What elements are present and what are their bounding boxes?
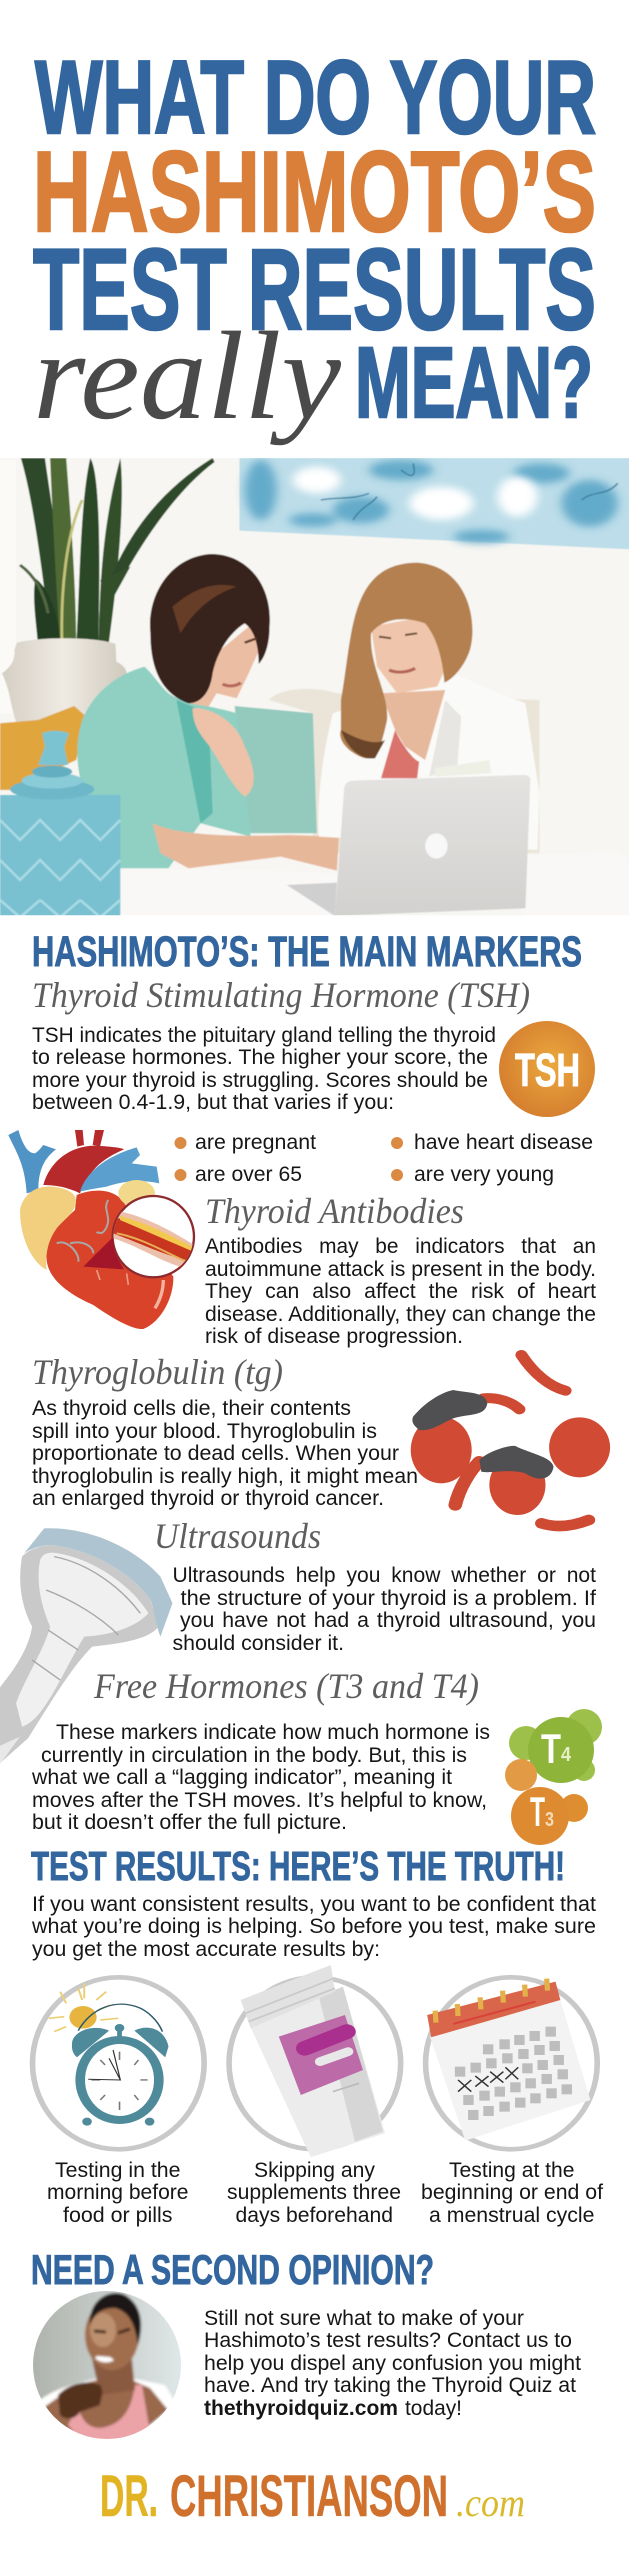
magnifier (113, 1196, 197, 1277)
text block: TSH: more your thyroid is struggling. Scores should be (32, 1069, 488, 1092)
text block: thyroglobulin: thyroglobulin is really high, it might mean (32, 1465, 418, 1488)
bullet: are over 65: are over 65 (195, 1163, 302, 1186)
text block: test results intro (31, 1893, 596, 1961)
text block: antibodies: disease. Additionally, they can change the (205, 1303, 596, 1326)
text block: antibodies: They can also affect the risk of heart (205, 1280, 596, 1303)
logo: dr christianson: .com (456, 2480, 525, 2525)
heading: ultrasounds: Ultrasounds (154, 1516, 321, 1556)
bullet: have heart disease: have heart disease (414, 1131, 593, 1154)
text block: second opinion: help you dispel any confusion you might (204, 2352, 581, 2375)
logo: dr christianson: DR. (100, 2464, 158, 2529)
caption: supplements: Skipping any (254, 2159, 376, 2182)
text block: second opinion: have. And try taking the Thyroid Quiz at (204, 2374, 576, 2397)
text block: second opinion (204, 2307, 581, 2420)
icon: calendar (426, 1977, 597, 2149)
icon: T4 and T3 molecules (505, 1709, 602, 1845)
yellow cushion (0, 706, 86, 790)
ceramic stool and lid (0, 731, 120, 918)
text block: second opinion: Still not sure what to make of your (204, 2307, 524, 2330)
sofa back (269, 689, 539, 853)
caption: cycle: Testing at the (449, 2159, 574, 2182)
text block: test results intro: If you want consistent results, you want to be confident that (32, 1893, 596, 1916)
text block: thyroglobulin (32, 1397, 418, 1510)
woman one (77, 554, 339, 871)
planter pot (2, 638, 127, 722)
photo: two women looking at a laptop (0, 457, 629, 923)
text block: antibodies (205, 1235, 596, 1348)
text block: free hormones (31, 1721, 490, 1834)
text block: ultrasounds: you have not had a thyroid ultrasound, you (180, 1609, 596, 1632)
caption: morning: food or pills (63, 2204, 172, 2227)
list: when TSH varies (174, 1131, 593, 1186)
plant (20, 458, 215, 647)
text block: TSH: to release hormones. The higher your score, the (32, 1046, 488, 1069)
heading: thyroid antibodies: Thyroid Antibodies (205, 1191, 464, 1231)
icon: TSH badge (499, 1021, 595, 1117)
text block: free hormones: what we call a “lagging indicator”, meaning it (31, 1766, 452, 1789)
text block: TSH: between 0.4-1.9, but that varies if you: (32, 1091, 394, 1114)
bullet: are pregnant: are pregnant (195, 1131, 316, 1154)
keyboard edge (287, 883, 337, 916)
logo: dr christianson: CHRISTIANSON (170, 2464, 448, 2529)
bullet: are very young: are very young (414, 1163, 554, 1186)
text block: second opinion: thethyroidquiz.com (204, 2397, 398, 2420)
text block: thyroglobulin: spill into your blood. Thyroglobulin is (32, 1420, 377, 1443)
text block: ultrasounds: the structure of your thyroid is a problem. If (180, 1587, 596, 1610)
icon: blood cells (411, 1355, 610, 1526)
icon: T4: 4 (561, 1744, 572, 1766)
text block: thyroglobulin: proportionate to dead cells. When your (32, 1442, 399, 1465)
text block: second opinion: today! (405, 2397, 462, 2420)
caption: morning: morning before (47, 2181, 188, 2204)
text block: test results intro: you get the most accurate results by: (32, 1938, 380, 1961)
icon: ultrasound probe (0, 1528, 172, 1767)
heading: TSH: Thyroid Stimulating Hormone (TSH) (32, 975, 530, 1015)
text block: antibodies: Antibodies may be indicators that an (205, 1235, 596, 1258)
heading: free hormones: Free Hormones (T3 and T4) (93, 1666, 479, 1706)
caption: supplements (227, 2159, 401, 2227)
text block: thyroglobulin: As thyroid cells die, their contents (32, 1397, 351, 1420)
text block: free hormones: These markers indicate how much hormone is (56, 1721, 490, 1744)
icon: alarm clock (32, 1977, 204, 2149)
icon: heart with artery magnifier (8, 1130, 197, 1329)
icon: T4 (509, 1709, 602, 1783)
text block: TSH (32, 1024, 496, 1114)
heading: second opinion: NEED A SECOND OPINION? (31, 2246, 434, 2293)
title word: really: really (33, 307, 341, 446)
text block: TSH: TSH indicates the pituitary gland telling the thyroid (32, 1024, 496, 1047)
icon: T4: T (541, 1725, 561, 1772)
text block: antibodies: risk of disease progression. (205, 1325, 463, 1348)
table (120, 852, 629, 917)
teal cushion (235, 706, 317, 833)
painting (239, 458, 629, 549)
icon: TSH badge: TSH (515, 1044, 580, 1096)
heading: thyroglobulin: Thyroglobulin (tg) (32, 1352, 283, 1392)
text block: ultrasounds (172, 1564, 596, 1655)
text block: ultrasounds: Ultrasounds help you know whether or not (172, 1564, 596, 1587)
caption: supplements: days beforehand (236, 2204, 393, 2227)
text block: free hormones: currently in circulation in the body. But, this is (41, 1744, 467, 1767)
text block: second opinion: Hashimoto’s test results? Contact us to (204, 2329, 572, 2352)
caption: cycle: beginning or end of (421, 2181, 603, 2204)
icon: supplement bottle (229, 1965, 401, 2157)
caption: cycle (421, 2159, 603, 2227)
caption: morning: Testing in the (55, 2159, 180, 2182)
text block: free hormones: moves after the TSH moves. It’s helpful to know, (32, 1789, 487, 1812)
photo: smiling woman portrait (30, 2288, 185, 2445)
text block: thyroglobulin: an enlarged thyroid or thyroid cancer. (32, 1487, 384, 1510)
caption: cycle: a menstrual cycle (429, 2204, 594, 2227)
icon: T3 (505, 1759, 588, 1845)
text block: test results intro: what you’re doing is helping. So before you test, make sure (31, 1915, 596, 1938)
title (33, 40, 596, 446)
text block: free hormones: but it doesn’t offer the full picture. (32, 1811, 347, 1834)
laptop (335, 775, 530, 916)
logo: dr christianson (100, 2464, 525, 2529)
icon: T3: 3 (545, 1809, 554, 1831)
text block: ultrasounds: should consider it. (172, 1632, 344, 1655)
icon: T3: T (530, 1788, 545, 1835)
caption: morning (47, 2159, 188, 2227)
woman two (318, 563, 539, 850)
caption: supplements: supplements three (227, 2181, 401, 2204)
text block: antibodies: autoimmune attack is present in the body. (205, 1258, 596, 1281)
